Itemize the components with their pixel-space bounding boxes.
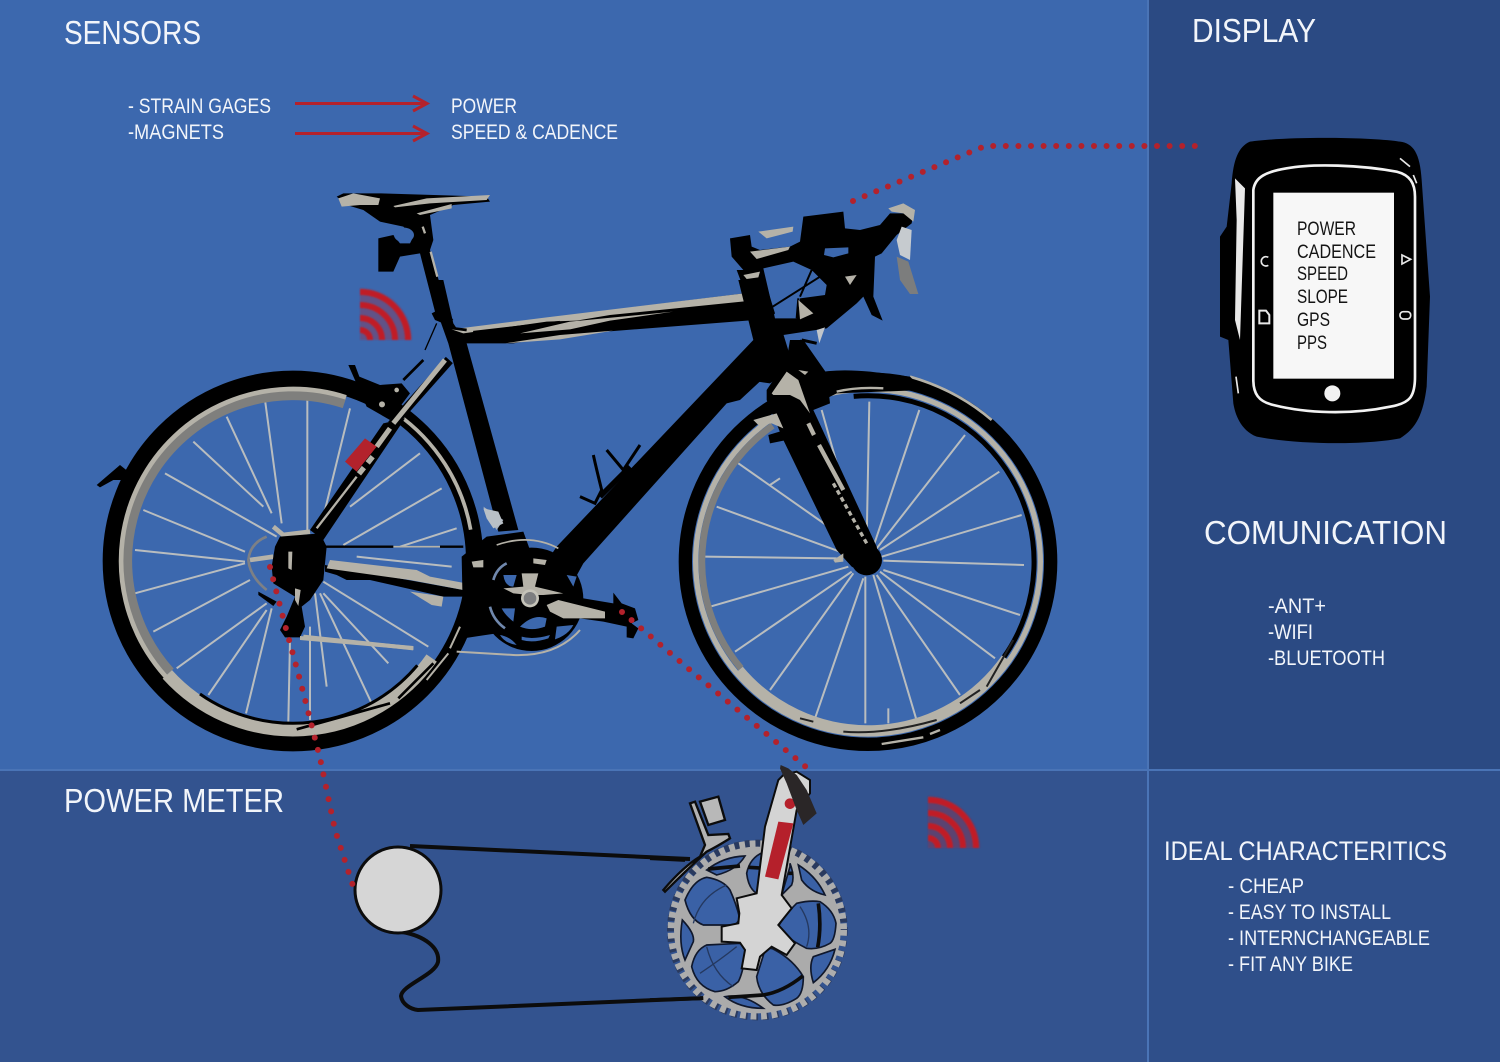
screen readout: SPEED bbox=[1297, 264, 1348, 285]
text block: communication list: -ANT+ bbox=[1268, 595, 1326, 618]
illustration: bicycle bbox=[97, 193, 1051, 744]
rear wheel bbox=[97, 365, 475, 743]
text block: ideal characteristics list: - EASY TO INSTALL bbox=[1228, 901, 1391, 924]
text block: sensor types and measures: - STRAIN GAGES bbox=[128, 95, 271, 118]
chainring, crank and derailleur bbox=[650, 765, 843, 1016]
text block: ideal characteristics list: - CHEAP bbox=[1228, 875, 1304, 898]
rear drivetrain and chainstay bbox=[248, 508, 638, 680]
dotted connector: crank to power meter bbox=[622, 612, 812, 772]
arrow: strain gages to power bbox=[295, 96, 427, 111]
screen readout: GPS bbox=[1297, 310, 1330, 331]
front wheel bbox=[685, 370, 1051, 744]
screen readout bbox=[1297, 219, 1376, 354]
chain and cable bbox=[401, 846, 705, 1010]
text block: communication list: -BLUETOOTH bbox=[1268, 647, 1385, 670]
heading: ideal characteristics: IDEAL CHARACTERITICS bbox=[1164, 836, 1447, 866]
seat and rear light bbox=[337, 193, 490, 350]
panel: sensors background bbox=[0, 0, 1148, 770]
dotted connector: hub to power meter bbox=[270, 567, 353, 886]
text block: sensor types and measures: SPEED & CADENCE bbox=[451, 121, 618, 144]
seat stay, brake and red sensor bbox=[310, 360, 449, 540]
text block: communication list: -WIFI bbox=[1268, 621, 1313, 644]
frame tubes bbox=[430, 280, 793, 582]
heading: power meter: POWER METER bbox=[64, 782, 284, 819]
bike computer bbox=[1220, 138, 1430, 443]
screen readout: POWER bbox=[1297, 219, 1356, 240]
panel: ideal characteristics background bbox=[1148, 770, 1500, 1062]
heading: display: DISPLAY bbox=[1192, 12, 1316, 49]
wifi icon: crank bbox=[928, 796, 980, 848]
wifi icon: rear bbox=[360, 288, 412, 340]
handlebar and controls bbox=[730, 203, 918, 343]
dotted connector: handlebar to display bbox=[853, 146, 1198, 201]
screen readout: CADENCE bbox=[1297, 242, 1376, 263]
text block: ideal characteristics list: - FIT ANY BIKE bbox=[1228, 953, 1353, 976]
heading: communication: COMUNICATION bbox=[1204, 514, 1447, 551]
hub circle bbox=[355, 847, 441, 933]
text block: sensor types and measures bbox=[128, 95, 618, 144]
fork bbox=[753, 340, 882, 575]
text block: ideal characteristics list: - INTERNCHANGEABLE bbox=[1228, 927, 1430, 950]
panel: display background bbox=[1148, 0, 1500, 770]
text block: sensor types and measures: POWER bbox=[451, 95, 517, 118]
arrow: magnets to speed and cadence bbox=[295, 126, 427, 141]
screen readout: PPS bbox=[1297, 333, 1327, 354]
text block: sensor types and measures: -MAGNETS bbox=[128, 121, 224, 144]
screen readout: SLOPE bbox=[1297, 287, 1348, 308]
text block: ideal characteristics list bbox=[1228, 875, 1430, 976]
power meter diagram bbox=[355, 765, 843, 1016]
heading: sensors: SENSORS bbox=[64, 14, 201, 51]
panel: power meter background bbox=[0, 770, 1148, 1062]
text block: communication list bbox=[1268, 595, 1385, 670]
